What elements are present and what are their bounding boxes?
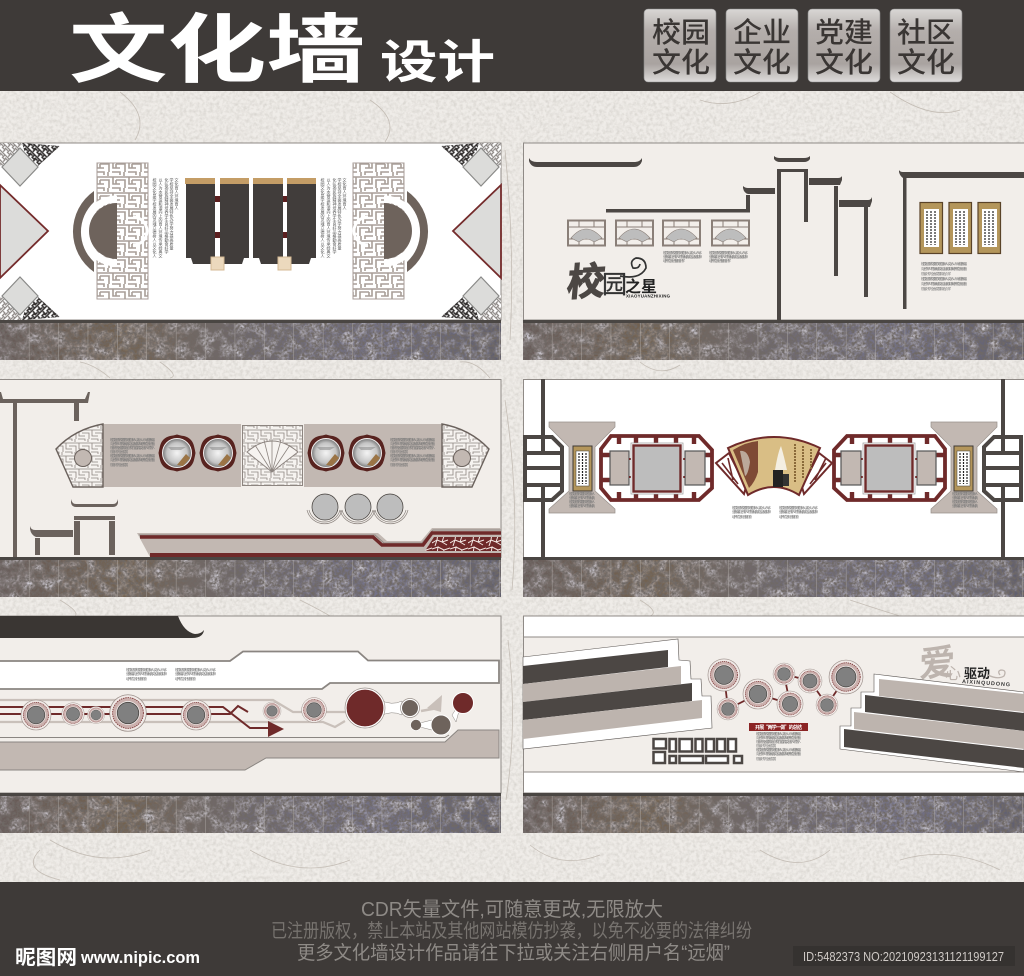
band text: 勤奋好学全面发展 xyxy=(110,449,129,454)
banner text: 勤奋好学全面发展特色办学努力提高质量文化育人环境育人 xyxy=(756,739,802,744)
roof lines and posts xyxy=(529,156,1024,320)
white band xyxy=(0,652,499,689)
fan windows xyxy=(568,220,749,246)
panel: wall design 3 xyxy=(0,380,501,597)
banner text: 校园文化是学校发展的灵魂立德树人以文化人以人为本营造和谐 xyxy=(756,731,802,736)
subtitle: 设计 xyxy=(380,25,495,91)
photo frames xyxy=(654,739,742,763)
left vertical text: 文化育人环境育人 xyxy=(174,177,180,210)
stone floor 4 xyxy=(523,557,1024,597)
button: 校园文化 xyxy=(644,9,716,82)
left lattice window xyxy=(73,163,148,299)
band text xyxy=(110,437,436,467)
band text: 校园文化是学校发展的灵魂立德树人以文化人以人为本营造和谐 xyxy=(390,453,436,458)
panel: wall design 6 xyxy=(523,616,1024,833)
roof shape xyxy=(0,616,204,638)
logo: 校园之星: 园 xyxy=(602,265,627,301)
panel: wall design 2 xyxy=(523,143,1024,360)
button: 党建文化 xyxy=(808,9,880,82)
band text: 校园文化是学校发展的灵魂立德树人以文化人以人为本营造和谐 xyxy=(110,453,156,458)
footer line 3: 更多文化墙设计作品请往下拉或关注右侧用户名“远烟” xyxy=(297,942,730,964)
small text under windows: 校园文化是学校发展的灵魂立德树人以文化人以人为本 xyxy=(663,250,703,255)
band text: 培养学生良好品格勤奋 xyxy=(126,676,148,681)
band text: 勤奋好学全面发展 xyxy=(390,449,409,454)
banner text: 勤奋好学全面发展 xyxy=(756,756,777,761)
scroll caption: 校园文化是学校发展的灵魂立德树人以文化人以人为本营造和谐 xyxy=(921,276,968,281)
stone floor 6 xyxy=(523,793,1024,833)
banner text: 勤奋好学全面发展 xyxy=(756,743,777,748)
taupe band xyxy=(0,730,499,770)
button: 企业文化: 文化 xyxy=(733,41,791,81)
small text under windows: 培养学生良好品格勤奋好学 xyxy=(663,258,686,263)
fan captions: 校园文化是学校发展的灵魂立德树人以文化人以人为本 xyxy=(779,505,819,510)
header bar xyxy=(0,0,1024,98)
small pedestal captions: 校园文化是学校发展的灵魂立德树人 xyxy=(569,499,596,504)
band text: 勤奋好学全面发展 xyxy=(390,462,409,467)
stone floor 2 xyxy=(523,320,1024,360)
right lattice window xyxy=(353,163,428,299)
center band xyxy=(103,424,442,487)
left vertical text: 学校坚持全面发展特色办学努力提高质量 xyxy=(170,177,174,251)
logo: 爱心驱动: 驱动 xyxy=(964,663,990,682)
stone floor 5 xyxy=(0,793,501,833)
band text: 培养学生良好品格勤奋 xyxy=(175,676,197,681)
corner lattices xyxy=(0,143,501,320)
timeline rings xyxy=(21,695,326,731)
left stair bars xyxy=(523,639,712,749)
panel: wall design 1 xyxy=(0,143,501,360)
logo: 校园之星: 之星 xyxy=(625,273,657,297)
calligraphy scrolls xyxy=(920,202,1000,254)
band text: 勤奋好学全面发展 xyxy=(110,462,129,467)
stone floor 1 xyxy=(0,320,501,360)
right vertical text: 校园文化是学校发展的灵魂立德树人以文化人 xyxy=(320,177,326,258)
fan captions xyxy=(732,505,819,519)
fan captions: 营造和谐向上的育人环境传承经典文化弘扬民族精神 xyxy=(779,509,819,514)
small pedestal captions: 营造和谐向上的育人环境传承经典 xyxy=(569,503,596,508)
right vertical text: 文化育人环境育人 xyxy=(342,177,348,210)
band text: 向上的育人环境传承经典文化弘扬民族精神培养学生良好品格 xyxy=(390,441,436,446)
center fan lattice xyxy=(242,426,302,486)
logo: 爱心驱动 xyxy=(919,633,1010,688)
band text: 校园文化是学校发展的灵魂立德树人以文化人以人为本营造和谐 xyxy=(110,437,156,442)
logo: 校园之星: XIAOYUANZHIXING xyxy=(626,294,671,298)
lower band xyxy=(137,528,501,557)
site watermark xyxy=(15,941,200,970)
right post and window xyxy=(834,379,1023,557)
band text: 向上的育人环境传承经典文化弘扬民族精神培养学生良好品格 xyxy=(390,457,436,462)
right vertical text: 以人为本营造和谐向上的育人环境传承经典文 xyxy=(326,178,332,259)
footer bar xyxy=(0,882,1024,976)
band text: 勤奋好学全面发展特色办学努力提高质量文化育人环境育人 xyxy=(390,445,436,450)
site watermark: www.nipic.com xyxy=(80,948,200,967)
left fan lattice xyxy=(56,424,103,487)
banner text: 向上的育人环境传承经典文化弘扬民族精神培养学生良好品格 xyxy=(756,751,802,756)
timeline lines xyxy=(0,695,442,737)
fan captions: 培养学生良好品格勤奋 xyxy=(732,514,753,519)
small text under windows xyxy=(663,250,749,263)
small pedestal captions: 营造和谐向上的育人环境传承经典 xyxy=(952,495,979,500)
band text: 勤奋好学全面发展特色办学努力提高质量文化育人环境育人 xyxy=(110,445,156,450)
logo: 校园之星 xyxy=(565,250,671,307)
button: 党建文化: 文化 xyxy=(815,41,873,81)
red banner xyxy=(749,723,808,731)
band text: 校园文化是学校发展的灵魂立德树人以文化人以人为本 xyxy=(175,667,217,672)
scroll caption: 向上的育人环境传承经典文化弘扬民族精神培养学生良好品格 xyxy=(921,281,968,286)
fan captions: 培养学生良好品格勤奋 xyxy=(779,514,800,519)
right vertical text xyxy=(320,177,348,259)
button: 企业文化 xyxy=(726,9,798,82)
right fan lattice xyxy=(442,424,489,487)
button: 社区文化: 社区 xyxy=(897,11,955,51)
center dark boards xyxy=(185,178,316,270)
scroll caption: 校园文化是学校发展的灵魂立德树人以文化人以人为本营造和谐 xyxy=(921,261,968,266)
scroll caption: 向上的育人环境传承经典文化弘扬民族精神培养学生良好品格 xyxy=(921,266,968,271)
button: 校园文化: 文化 xyxy=(652,41,710,81)
footer line 2: 已注册版权，禁止本站及其他网站模仿抄袭，以免不必要的法律纠纷 xyxy=(271,920,752,942)
banner text xyxy=(756,731,802,761)
band text: 校园文化是学校发展的灵魂立德树人以文化人以人为本 xyxy=(126,667,168,672)
image id box xyxy=(793,946,1015,966)
button: 社区文化 xyxy=(890,9,962,82)
small text under windows: 培养学生良好品格勤奋好学 xyxy=(709,258,732,263)
band text: 营造和谐向上的育人环境传承经典文化弘扬民族精神 xyxy=(175,671,217,676)
center fan with image xyxy=(716,437,832,495)
small text under windows: 营造和谐向上的育人环境传承经典文化弘扬民族精神 xyxy=(709,254,749,259)
gate and furniture xyxy=(0,392,118,557)
band text: 向上的育人环境传承经典文化弘扬民族精神培养学生良好品格 xyxy=(110,441,156,446)
small pedestal captions: 校园文化是学校发展的灵魂立德树人 xyxy=(952,499,979,504)
side triangles xyxy=(0,185,501,278)
band text: 向上的育人环境传承经典文化弘扬民族精神培养学生良好品格 xyxy=(110,457,156,462)
scroll caption: 勤奋好学全面发展特色办学 xyxy=(921,286,952,291)
left vertical text: 校园文化是学校发展的灵魂立德树人以文化人 xyxy=(152,177,158,258)
small pedestal captions xyxy=(569,491,979,508)
site watermark: 昵图网 xyxy=(15,941,77,970)
small pedestal captions: 营造和谐向上的育人环境传承经典 xyxy=(569,495,596,500)
small pedestal captions: 营造和谐向上的育人环境传承经典 xyxy=(952,503,979,508)
button: 社区文化: 文化 xyxy=(897,41,955,81)
round mirrors xyxy=(158,434,386,472)
stone floor 3 xyxy=(0,557,501,597)
circle cluster xyxy=(345,688,474,735)
band text xyxy=(126,667,217,681)
band text: 营造和谐向上的育人环境传承经典文化弘扬民族精神 xyxy=(126,671,168,676)
left vertical text: 化弘扬民族精神培养学生良好品格勤奋好学 xyxy=(164,177,170,254)
left vertical text: 以人为本营造和谐向上的育人环境传承经典文 xyxy=(158,178,164,259)
red banner: 开展“两学一做”的总结 xyxy=(755,724,802,731)
connected rings xyxy=(708,659,863,720)
button: 党建文化: 党建 xyxy=(815,11,873,51)
fan captions: 营造和谐向上的育人环境传承经典文化弘扬民族精神 xyxy=(732,509,772,514)
fan captions: 校园文化是学校发展的灵魂立德树人以文化人以人为本 xyxy=(732,505,772,510)
button: 校园文化: 校园 xyxy=(652,11,710,51)
panel: wall design 4 xyxy=(523,379,1024,597)
left vertical text xyxy=(152,177,180,259)
small text under windows: 营造和谐向上的育人环境传承经典文化弘扬民族精神 xyxy=(663,254,703,259)
logo: 爱心驱动: 爱 xyxy=(919,633,956,688)
scroll caption: 勤奋好学全面发展特色办学 xyxy=(921,271,952,276)
banner text: 向上的育人环境传承经典文化弘扬民族精神培养学生良好品格 xyxy=(756,735,802,740)
right vertical text: 学校坚持全面发展特色办学努力提高质量 xyxy=(338,177,342,251)
logo: 校园之星: 校 xyxy=(565,250,608,307)
cream wall band xyxy=(524,637,1024,772)
small text under windows: 校园文化是学校发展的灵魂立德树人以文化人以人为本 xyxy=(709,250,749,255)
band text: 校园文化是学校发展的灵魂立德树人以文化人以人为本营造和谐 xyxy=(390,437,436,442)
small pedestal captions: 校园文化是学校发展的灵魂立德树人 xyxy=(569,491,596,496)
small pedestal captions: 校园文化是学校发展的灵魂立德树人 xyxy=(952,491,979,496)
logo: 爱心驱动: 心 xyxy=(945,660,961,684)
footer line 1: CDR矢量文件,可随意更改,无限放大 xyxy=(361,898,663,921)
banner text: 校园文化是学校发展的灵魂立德树人以文化人以人为本营造和谐 xyxy=(756,747,802,752)
right stair bars xyxy=(840,674,1024,772)
logo: 爱心驱动: AIXINQUDONG xyxy=(962,679,1010,688)
button: 企业文化: 企业 xyxy=(733,11,791,51)
left post and window xyxy=(523,379,712,557)
scroll caption xyxy=(921,261,968,291)
three circles xyxy=(307,494,408,524)
right vertical text: 化弘扬民族精神培养学生良好品格勤奋好学 xyxy=(332,177,338,254)
panel: wall design 5 xyxy=(0,616,501,833)
